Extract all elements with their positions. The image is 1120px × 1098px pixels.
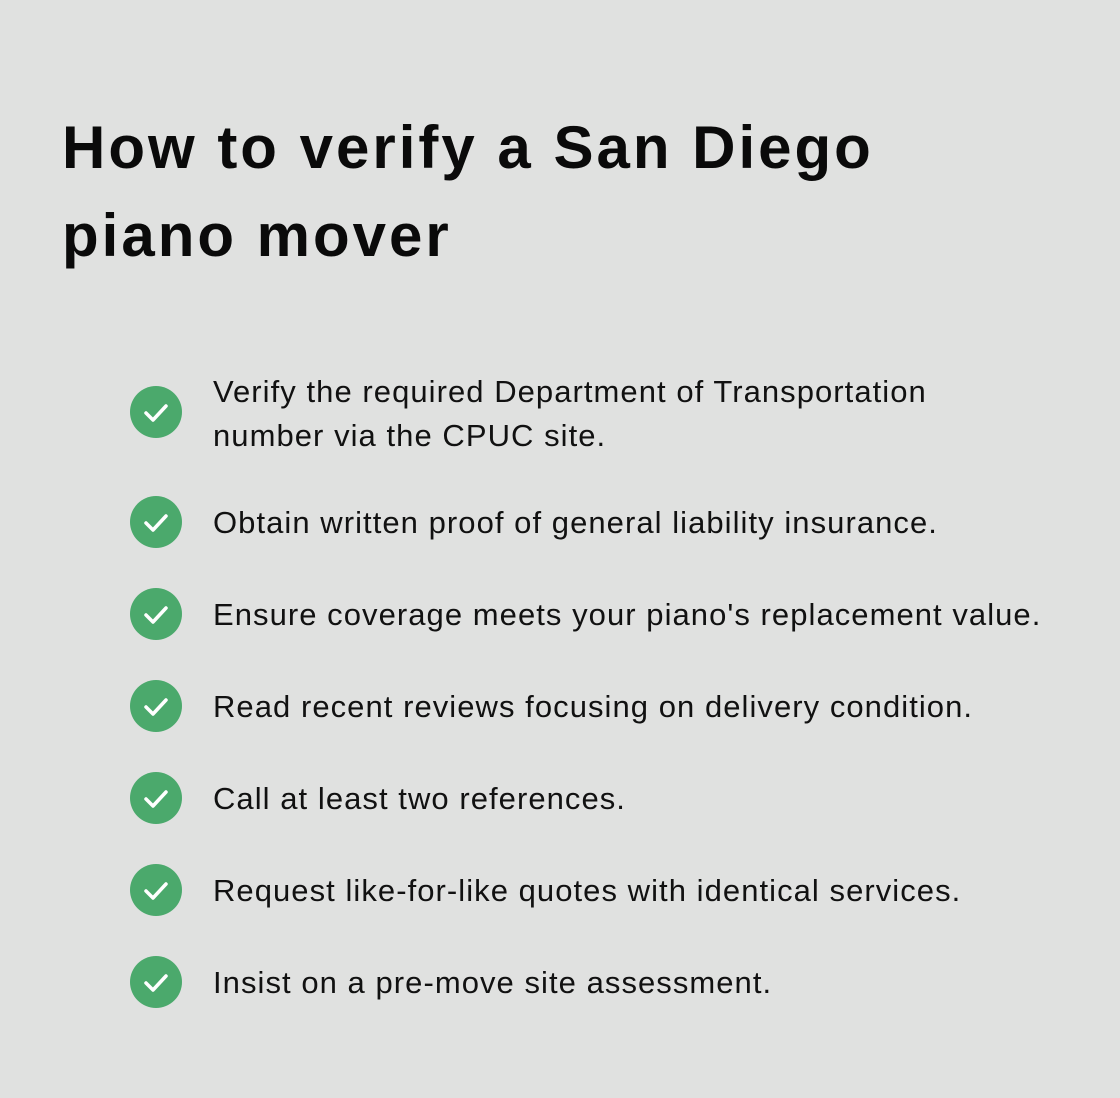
text <box>213 374 927 453</box>
item 2 <box>130 496 938 548</box>
item 3 <box>130 588 1041 640</box>
text: Read recent reviews focusing on delivery condition. <box>213 689 973 724</box>
title: piano mover <box>62 202 452 269</box>
text: number via the CPUC site. <box>213 418 606 453</box>
item 5 <box>130 772 626 824</box>
item 6 <box>130 864 961 916</box>
text: Ensure coverage meets your piano's replacement value. <box>213 597 1041 632</box>
text: Call at least two references. <box>213 781 626 816</box>
text: Verify the required Department of Transportation <box>213 374 927 409</box>
title: How to verify a San Diego <box>62 114 874 181</box>
icon: check <box>130 386 182 438</box>
item 7 <box>130 956 772 1008</box>
title <box>62 114 874 269</box>
text: Request like-for-like quotes with identical services. <box>213 873 961 908</box>
item 4 <box>130 680 973 732</box>
icon: check <box>130 588 182 640</box>
text: Obtain written proof of general liability insurance. <box>213 505 938 540</box>
text: Insist on a pre-move site assessment. <box>213 965 772 1000</box>
icon: check <box>130 956 182 1008</box>
item 1 <box>130 374 927 453</box>
icon: check <box>130 772 182 824</box>
icon: check <box>130 680 182 732</box>
icon: check <box>130 864 182 916</box>
icon: check <box>130 496 182 548</box>
